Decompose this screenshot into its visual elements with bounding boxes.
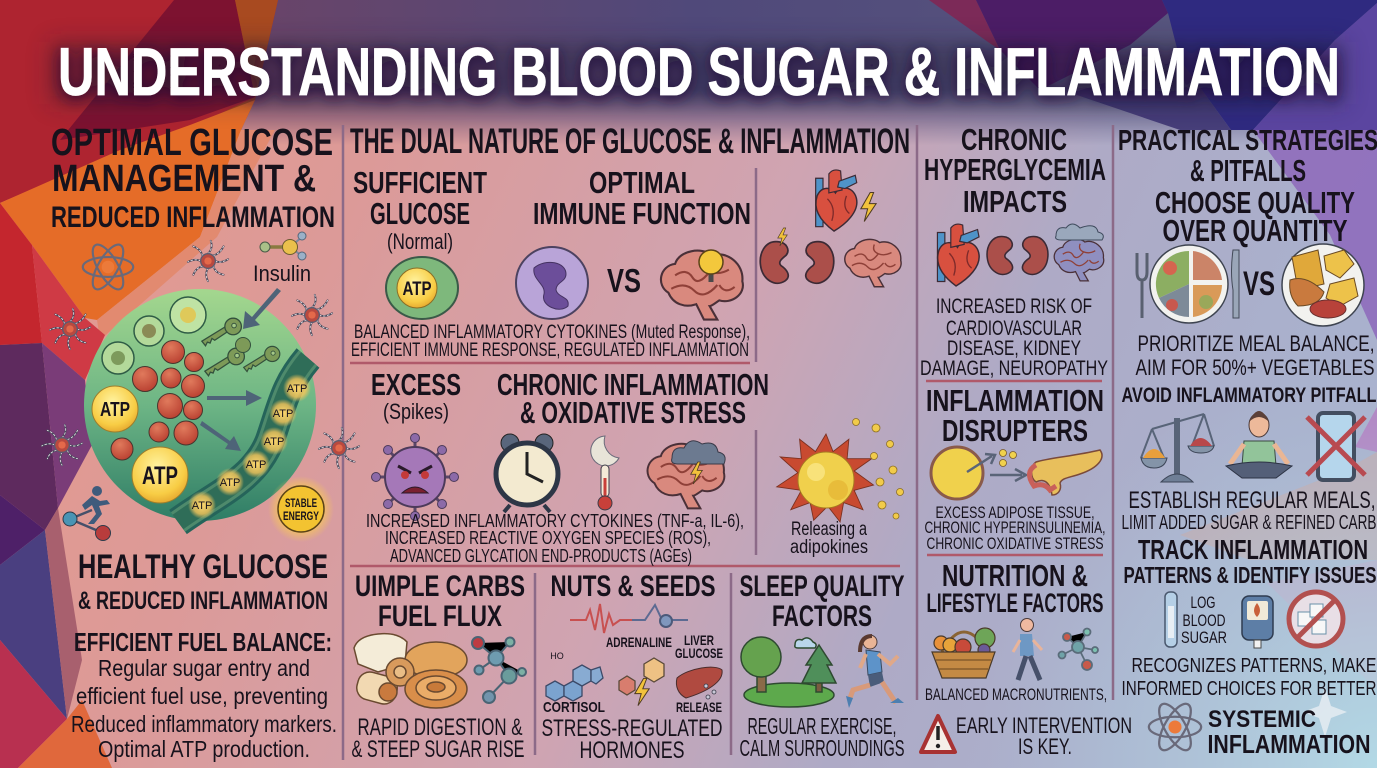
- icon: balance scale: [1141, 414, 1214, 482]
- icon: phone crossed out: [1307, 413, 1365, 480]
- labels: CORTISOL: [543, 699, 605, 716]
- text: risks: INCREASED RISK OF: [936, 295, 1092, 318]
- labels: [543, 632, 723, 716]
- icon: adipose to pancreas: [931, 447, 1102, 499]
- heading: optimal glucose management: REDUCED INFLAMMATION: [51, 201, 335, 234]
- text: macronutrients: BALANCED MACRONUTRIENTS,: [925, 685, 1107, 704]
- text: risks: DAMAGE, NEUROPATHY: [920, 357, 1108, 380]
- heading: nutrition and lifestyle: NUTRITION &: [942, 558, 1088, 593]
- text: [740, 713, 904, 761]
- heading: FUEL FLUX: [378, 600, 502, 633]
- text: increased cytokines: INCREASED INFLAMMATORY CYTOKINES (TNF-a, IL-6),: [366, 511, 744, 531]
- blood vessel: [178, 358, 308, 522]
- text: risks: DISEASE, KIDNEY: [947, 337, 1081, 360]
- text: efficient fuel balance: EFFICIENT FUEL BALANCE:: [74, 627, 332, 657]
- heading: optimal glucose management: MANAGEMENT &: [52, 158, 316, 200]
- heading: chronic inflammation: CHRONIC INFLAMMATION: [497, 367, 769, 402]
- icon: ATP cell: ATP: [402, 279, 432, 300]
- heading: [740, 570, 904, 633]
- text: balanced cytokines: BALANCED INFLAMMATORY CYTOKINES (Muted Response),: [354, 322, 750, 343]
- icon: molecule: [1058, 628, 1098, 670]
- labels: GLUCOSE: [675, 645, 723, 661]
- diagram: glucose cell: [84, 289, 316, 522]
- heading: nutrition and lifestyle: LIFESTYLE FACTORS: [926, 588, 1104, 618]
- heading: chronic hyperglycemia impacts: [924, 122, 1106, 219]
- labels: ADRENALINE: [606, 634, 672, 650]
- text: HORMONES: [580, 737, 684, 764]
- text: early intervention: EARLY INTERVENTION: [956, 713, 1132, 738]
- heading: optimal immune function: IMMUNE FUNCTION: [533, 196, 751, 231]
- ATP in vessel: ATP: [264, 436, 284, 448]
- icon: adrenaline molecule: [619, 658, 664, 706]
- ATP spheres: ATP: [100, 399, 130, 421]
- heading: nutrition and lifestyle: [926, 558, 1104, 618]
- text: efficient fuel balance: [71, 627, 337, 762]
- heading: sufficient glucose: [353, 165, 487, 254]
- icon: molecule: [472, 637, 526, 703]
- heading: healthy glucose: HEALTHY GLUCOSE: [78, 548, 328, 586]
- ATP in vessel: [188, 374, 311, 519]
- text: increased cytokines: [366, 511, 744, 566]
- heading: track inflammation: [1124, 534, 1376, 588]
- heading: inflammation disrupters: [926, 383, 1104, 448]
- text: meal balance: [1136, 331, 1374, 380]
- text: disrupters: EXCESS ADIPOSE TISSUE,: [936, 503, 1094, 522]
- heading: inflammation disrupters: INFLAMMATION: [926, 383, 1104, 418]
- text: early intervention: [956, 713, 1132, 759]
- icon: angry virus: [372, 434, 458, 520]
- icon: systemic atom: [1149, 699, 1201, 755]
- label: releasing adipokines: adipokines: [790, 537, 868, 558]
- heading: sufficient glucose: SUFFICIENT: [353, 165, 487, 200]
- ATP in vessel: ATP: [287, 383, 307, 395]
- icon: processed food plate: [1282, 244, 1364, 326]
- labels: LIVER: [684, 632, 714, 648]
- heading: dual nature: THE DUAL NATURE OF GLUCOSE & INFLAMMATION: [350, 122, 910, 161]
- heading: healthy glucose: & REDUCED INFLAMMATION: [78, 587, 328, 615]
- icon: ATP cell: [386, 257, 458, 319]
- text: CALM SURROUNDINGS: [740, 735, 904, 761]
- text: disrupters: CHRONIC HYPERINSULINEMIA,: [924, 518, 1106, 537]
- icon: heart and organs: [760, 170, 901, 287]
- text: [542, 715, 722, 764]
- text: & STEEP SUGAR RISE: [352, 736, 524, 763]
- label: systemic inflammation: [1208, 706, 1370, 759]
- ATP in vessel: ATP: [273, 408, 293, 420]
- label: log blood sugar: [1181, 593, 1227, 647]
- text: regular meals: [1122, 487, 1376, 534]
- panel: optimal glucose management: [42, 122, 359, 762]
- ATP spheres: [92, 386, 188, 503]
- text: REGULAR EXERCISE,: [748, 713, 896, 739]
- labels: RELEASE: [676, 699, 722, 715]
- heading: optimal immune function: [533, 165, 751, 231]
- icon: atom: [83, 240, 133, 294]
- sub-panel: sleep quality: [740, 570, 904, 761]
- heading: chronic inflammation: & OXIDATIVE STRESS: [520, 395, 746, 430]
- text: efficient fuel balance: efficient fuel use, preventing: [76, 683, 328, 709]
- heading: excess spikes: [371, 367, 461, 424]
- icon: warning triangle: [921, 716, 955, 752]
- text: efficient fuel balance: Reduced inflammatory markers.: [71, 711, 337, 737]
- panel: practical strategies: [1118, 125, 1377, 759]
- red glucose balls: [111, 340, 204, 460]
- icon: cortisol molecule: HO: [550, 651, 564, 661]
- heading: chronic hyperglycemia impacts: CHRONIC: [961, 122, 1067, 157]
- label: log blood sugar: SUGAR: [1181, 628, 1227, 647]
- icon: trees in park: [741, 637, 836, 707]
- heading: sufficient glucose: GLUCOSE: [370, 196, 470, 231]
- label: releasing adipokines: Releasing a: [791, 519, 867, 540]
- label: vs: VS: [1243, 265, 1275, 303]
- heading: chronic inflammation: [497, 367, 769, 430]
- icon: thermometer: [598, 465, 612, 510]
- icon: meditating person: [1226, 411, 1292, 478]
- heading: UIMPLE CARBS: [355, 570, 525, 603]
- green cells: [102, 297, 206, 374]
- icon: brain with bulb: [661, 250, 743, 320]
- text: risks: CARDIOVASCULAR: [946, 317, 1082, 340]
- heading: optimal glucose management: [51, 122, 335, 234]
- label: insulin: Insulin: [253, 261, 311, 286]
- panel: hyperglycemia: [920, 122, 1132, 759]
- icon: no sugar: [1289, 592, 1343, 646]
- icon: pastries: [354, 634, 467, 708]
- icon: stable energy badge: ENERGY: [283, 509, 319, 523]
- panel: dual nature: [350, 122, 910, 764]
- text: disrupters: CHRONIC OXIDATIVE STRESS: [926, 534, 1104, 553]
- heading: NUTS & SEEDS: [550, 570, 716, 603]
- arrows: [200, 288, 281, 451]
- icon: runner on molecule: [63, 486, 110, 540]
- icon: stable energy badge: STABLE: [285, 496, 317, 510]
- icon: stable energy badge: [268, 476, 334, 542]
- icon: immune cell: [516, 247, 588, 319]
- heading: practical strategies: [1118, 125, 1377, 248]
- text: STRESS-REGULATED: [542, 715, 722, 742]
- icon: insulin molecule: [260, 232, 306, 260]
- text: [352, 714, 524, 763]
- label: vs: VS: [607, 262, 641, 299]
- heading: chronic hyperglycemia impacts: IMPACTS: [963, 184, 1067, 219]
- heading: healthy glucose: [78, 548, 328, 615]
- heading: excess spikes: (Spikes): [383, 399, 449, 424]
- label: log blood sugar: LOG: [1190, 593, 1216, 612]
- icon: immune cells: [42, 241, 359, 468]
- text: balanced cytokines: EFFICIENT IMMUNE RESPONSE, REGULATED INFLAMMATION: [351, 340, 749, 361]
- heading: optimal immune function: OPTIMAL: [589, 165, 695, 200]
- label: systemic inflammation: SYSTEMIC: [1208, 706, 1316, 733]
- icon: pulse line: [570, 604, 688, 633]
- keys: [202, 318, 280, 376]
- ATP spheres: ATP: [142, 462, 178, 490]
- icon: balanced plate: [1137, 245, 1239, 323]
- heading: FACTORS: [772, 600, 872, 633]
- heading: inflammation disrupters: DISRUPTERS: [942, 413, 1088, 448]
- text: balanced cytokines: [351, 322, 750, 361]
- text: efficient fuel balance: Regular sugar entry and: [98, 655, 310, 681]
- icon: glucometer: [1242, 596, 1273, 648]
- text: early intervention: IS KEY.: [1018, 734, 1072, 759]
- heading: SLEEP QUALITY: [740, 570, 904, 603]
- label: log blood sugar: BLOOD: [1182, 611, 1226, 630]
- text: increased cytokines: ADVANCED GLYCATION END-PRODUCTS (AGEs): [390, 546, 692, 566]
- text: increased cytokines: INCREASED REACTIVE OXYGEN SPECIES (ROS),: [385, 528, 711, 548]
- ATP in vessel: ATP: [246, 459, 266, 471]
- icons: heart kidneys brain: [937, 224, 1104, 286]
- sub-panel: nuts and seeds: [542, 570, 723, 764]
- icon: alarm clock: [496, 434, 558, 512]
- text: recognizes patterns: [1122, 655, 1376, 700]
- icon: brain with storm cloud: [648, 441, 725, 508]
- heading: sufficient glucose: (Normal): [387, 229, 453, 254]
- heading: excess spikes: EXCESS: [371, 367, 461, 402]
- ATP in vessel: ATP: [192, 500, 212, 512]
- heading: [355, 570, 525, 633]
- icon: food basket: [932, 628, 995, 678]
- text: RAPID DIGESTION &: [358, 714, 522, 741]
- text: disrupters: [924, 503, 1106, 553]
- icon: moon: [591, 436, 619, 466]
- sub-panel: simple carbs: [352, 570, 526, 763]
- icon: walking person: [1013, 618, 1042, 680]
- icon: liver: [676, 667, 722, 699]
- text: risks: [920, 295, 1108, 380]
- heading: practical strategies: & PITFALLS: [1190, 153, 1306, 188]
- icon: adipose burst: [777, 418, 904, 522]
- icon: blood sugar log: [1165, 592, 1177, 647]
- icon: cortisol molecule: [546, 651, 603, 701]
- label: releasing adipokines: [790, 519, 868, 558]
- text: efficient fuel balance: Optimal ATP production.: [98, 736, 310, 762]
- heading: chronic hyperglycemia impacts: HYPERGLYCEMIA: [924, 152, 1106, 187]
- icon: runner: [846, 635, 904, 708]
- ATP in vessel: ATP: [220, 477, 240, 489]
- heading: optimal glucose management: OPTIMAL GLUCOSE: [51, 122, 333, 164]
- panel dividers: [343, 125, 1113, 760]
